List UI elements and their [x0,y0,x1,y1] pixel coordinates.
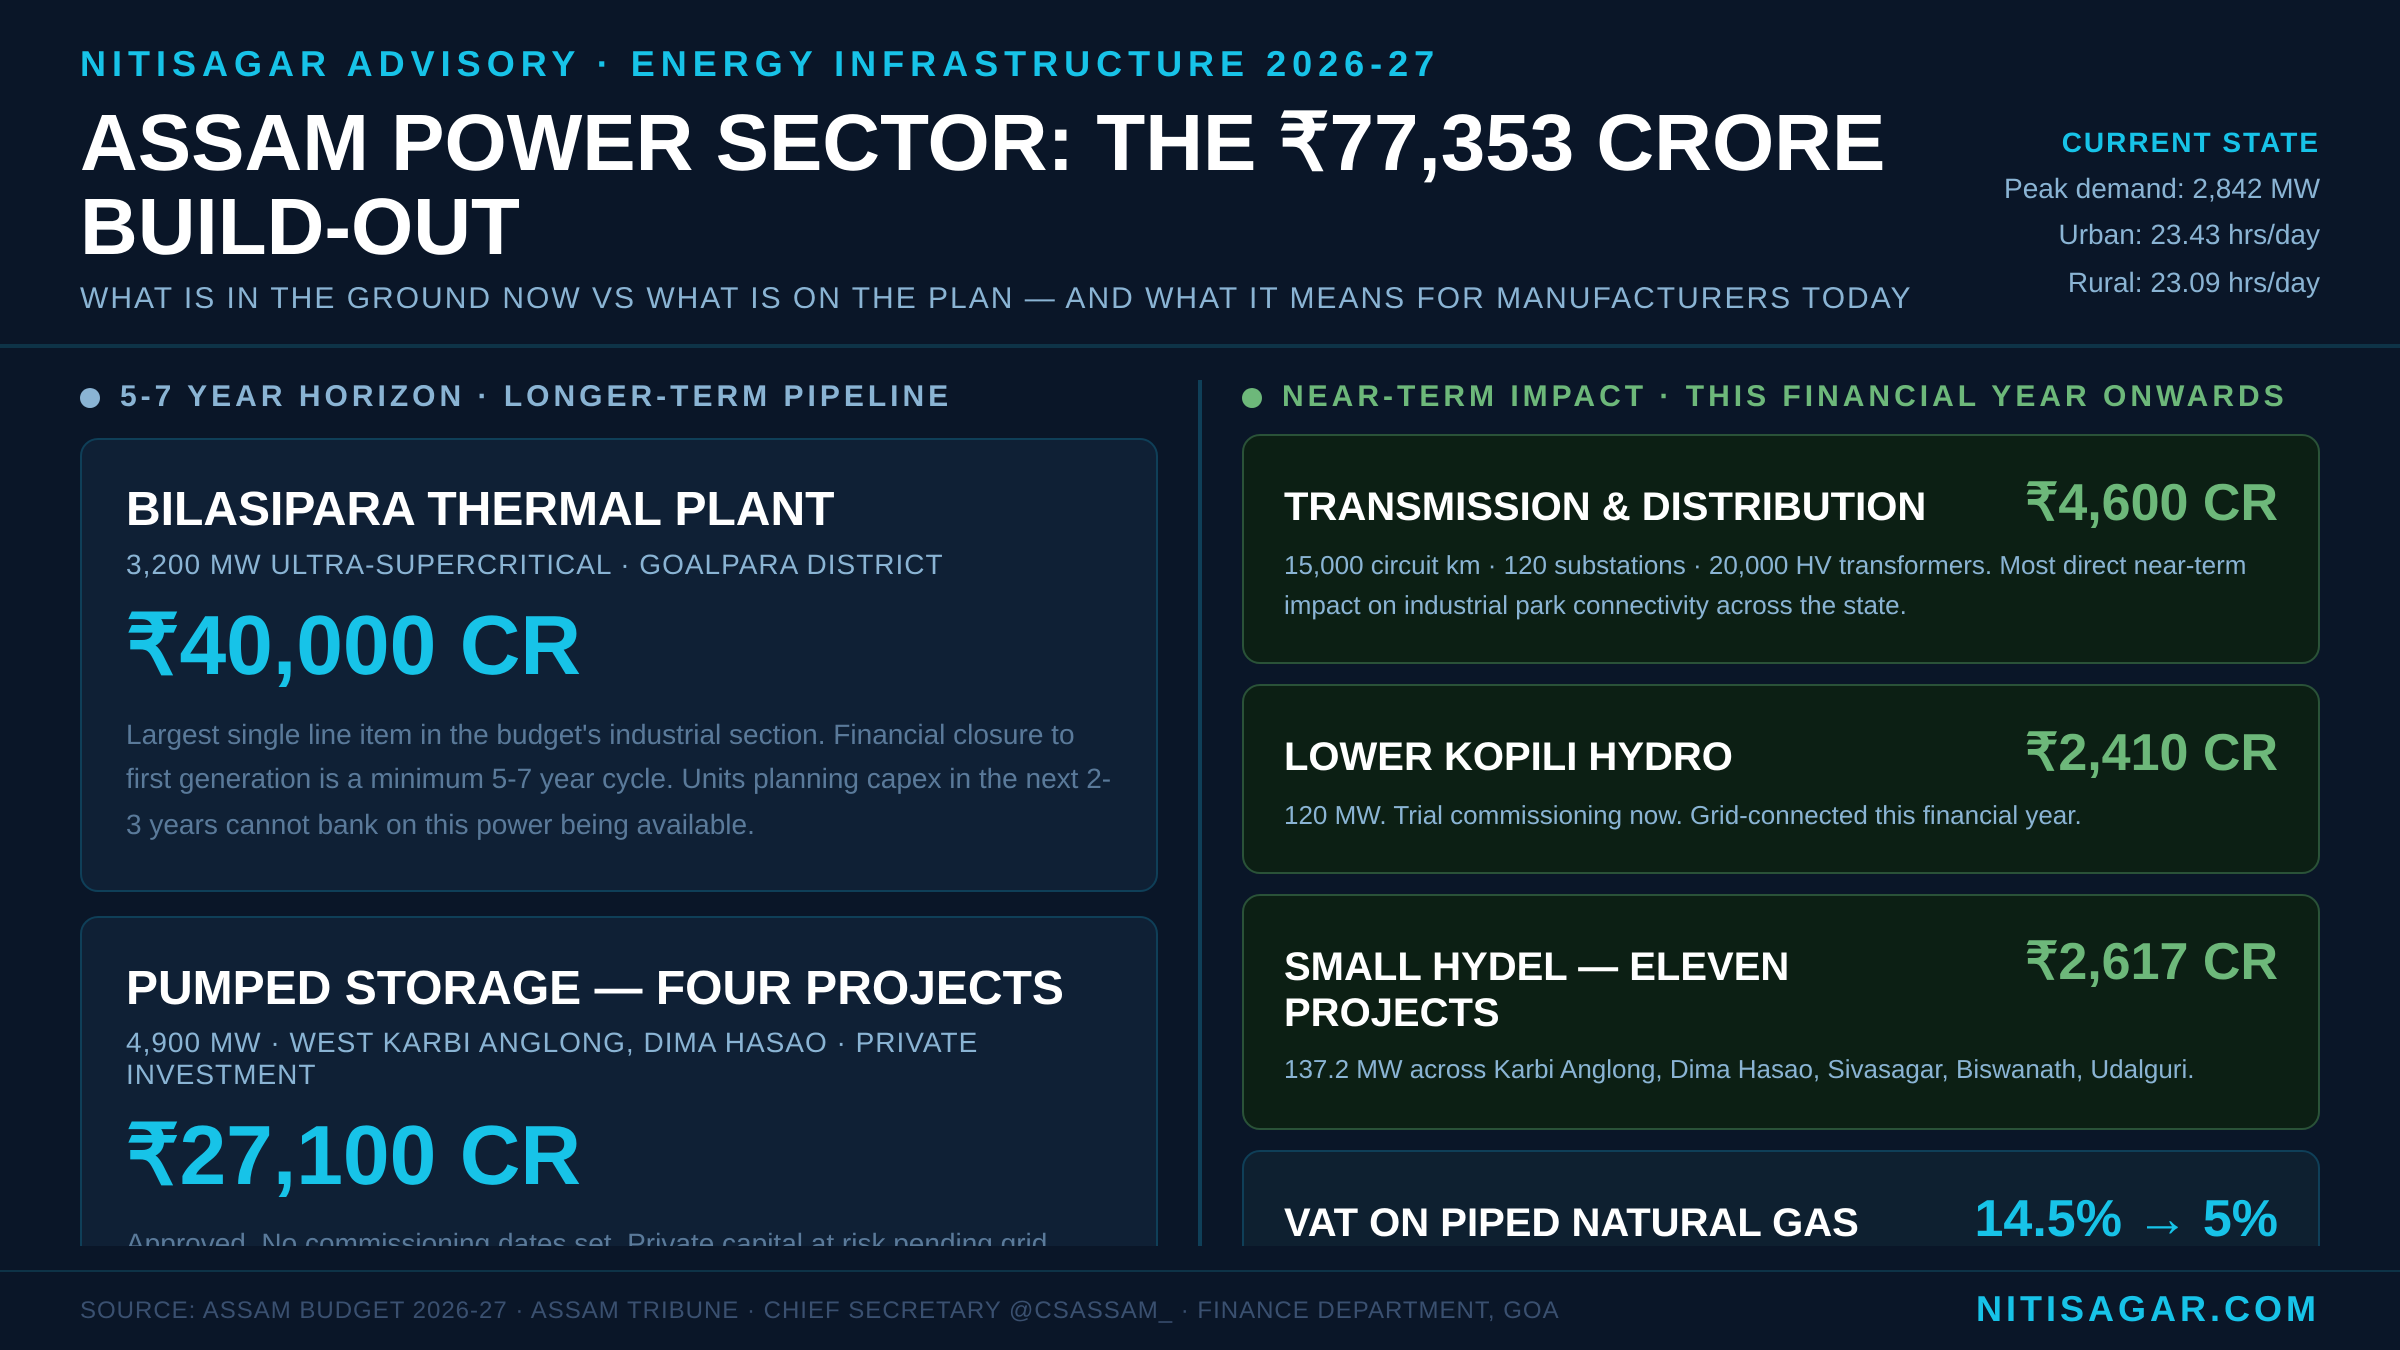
card title: TRANSMISSION & DISTRIBUTION [1284,485,1926,529]
card title: VAT ON PIPED NATURAL GAS [1284,1201,1859,1245]
current state heading: CURRENT STATE [2062,127,2320,158]
heading text: 5-7 YEAR HORIZON · LONGER-TERM PIPELINE [120,380,952,413]
column heading: long-term [80,380,952,413]
brand: NITISAGAR.COM [1976,1288,2320,1329]
card title: BILASIPARA THERMAL PLANT [126,483,834,536]
source line: SOURCE: ASSAM BUDGET 2026-27 · ASSAM TRIBUNE · CHIEF SECRETARY @CSASSAM_ · FINANCE DEPARTMENT, GOA [80,1297,1560,1324]
card subtitle: 4,900 MW · WEST KARBI ANGLONG, DIMA HASAO · PRIVATE [126,1027,978,1058]
panel: lower kopili hydro [1242,684,2320,874]
description: first generation is a minimum 5-7 year cycle. Units planning capex in the next 2- [126,763,1111,794]
description: impact on industrial park connectivity across the state. [1284,590,1907,620]
title: ASSAM POWER SECTOR: THE ₹77,353 CRORE [80,98,1885,187]
eyebrow: NITISAGAR ADVISORY · ENERGY INFRASTRUCTURE 2026-27 [80,43,1440,84]
amount: ₹2,410 CR [2025,724,2278,782]
icon: green dot [1242,388,1262,408]
current state stats [2004,173,2320,298]
panel: transmission and distribution [1242,434,2320,664]
description: 15,000 circuit km · 120 substations · 20,000 HV transformers. Most direct near-term [1284,550,2246,580]
subtitle: WHAT IS IN THE GROUND NOW VS WHAT IS ON THE PLAN — AND WHAT IT MEANS FOR MANUFACTURERS TODAY [80,282,1913,315]
card title: LOWER KOPILI HYDRO [1284,735,1733,779]
current state stats: Peak demand: 2,842 MW [2004,173,2320,204]
icon: blue dot [80,388,100,408]
card title: SMALL HYDEL — ELEVEN [1284,945,1789,989]
description: 137.2 MW across Karbi Anglong, Dima Hasao, Sivasagar, Biswanath, Udalguri. [1284,1054,2194,1084]
title: BUILD-OUT [80,182,520,271]
card title [1284,945,1789,1035]
card subtitle [126,1027,978,1090]
heading text: NEAR-TERM IMPACT · THIS FINANCIAL YEAR ONWARDS [1282,380,2288,413]
description [126,719,1111,840]
amount: ₹2,617 CR [2025,933,2278,991]
description: 3 years cannot bank on this power being available. [126,809,755,840]
footer [0,1270,2400,1350]
description: 120 MW. Trial commissioning now. Grid-connected this financial year. [1284,800,2082,830]
card subtitle: 3,200 MW ULTRA-SUPERCRITICAL · GOALPARA DISTRICT [126,549,944,580]
main content [80,380,2320,1246]
amount: ₹40,000 CR [126,598,581,692]
description [1284,550,2246,620]
header [0,0,2400,348]
current state stats: Rural: 23.09 hrs/day [2068,267,2320,298]
current state stats: Urban: 23.43 hrs/day [2058,219,2320,250]
panel: small hydel [1242,894,2320,1130]
card title: PROJECTS [1284,991,1500,1035]
panel: VAT on piped natural gas [1242,1150,2320,1350]
divider [1198,380,1202,1246]
description: Largest single line item in the budget's industrial section. Financial closure to [126,719,1075,750]
card title: PUMPED STORAGE — FOUR PROJECTS [126,962,1064,1015]
card subtitle: INVESTMENT [126,1059,316,1090]
panel: pumped storage [80,916,1158,1350]
column heading: near-term [1242,380,2288,413]
title [80,98,1885,271]
amount: ₹27,100 CR [126,1108,581,1202]
panel: Bilasipara thermal plant [80,438,1158,892]
amount: ₹4,600 CR [2025,474,2278,532]
